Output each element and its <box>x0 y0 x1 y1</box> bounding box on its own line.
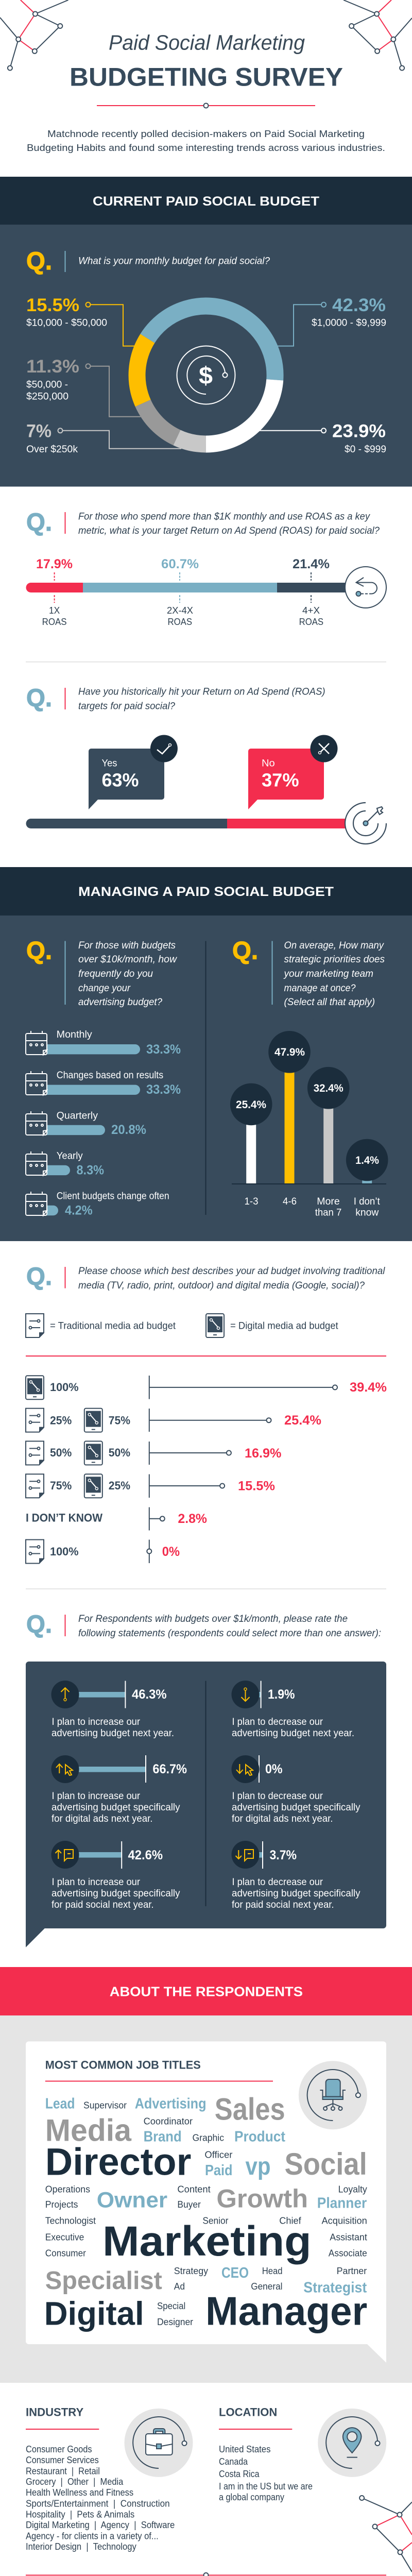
donut labels: $0 - $999 <box>345 444 386 455</box>
question: priorities: (Select all that apply) <box>284 997 375 1008</box>
row: yearly: 8.3% <box>76 1163 104 1178</box>
panel: managing budget <box>0 916 412 1241</box>
stat: increase paid social <box>52 1841 180 1910</box>
question: frequency: over $10k/month, how <box>78 954 177 965</box>
panel: job titles card <box>26 2041 386 2363</box>
question: priorities: manage at once? <box>284 983 356 994</box>
bar chart: priorities: 25.4% <box>236 1099 266 1111</box>
row: changes based on results: Changes based on results <box>57 1070 163 1081</box>
question: priorities <box>232 938 385 1008</box>
word cloud: Coordinator <box>144 2116 193 2127</box>
ROAS labels <box>36 557 330 627</box>
title <box>70 31 343 92</box>
heading: location: LOCATION <box>219 2406 277 2419</box>
row: changes based on results: 33.3% <box>146 1082 181 1097</box>
row: 25/75: 75% <box>109 1414 130 1427</box>
stat: increase digital: 66.7% <box>152 1762 187 1776</box>
location list: Costa Rica <box>219 2468 260 2479</box>
donut labels: 11.3% <box>26 357 79 377</box>
row: 75/25: 15.5% <box>238 1479 275 1493</box>
question: statements <box>26 1611 381 1639</box>
word cloud: Social <box>284 2147 367 2181</box>
question: monthly budget: What is your monthly budget for paid social? <box>78 256 270 267</box>
question: target ROAS: metric, what is your target Return on Ad Spend (ROAS) for paid social? <box>78 526 380 536</box>
donut labels: 15.5% <box>26 295 79 315</box>
stat: increase digital: for digital ads next year. <box>52 1814 152 1824</box>
industry list: Consumer Goods <box>26 2444 92 2454</box>
section header: current paid social budget: CURRENT PAID SOCIAL BUDGET <box>93 194 319 209</box>
industry list: Interior Design | Technology <box>26 2541 136 2552</box>
stat: increase digital <box>52 1755 187 1824</box>
question: frequency: For those with budgets <box>78 940 176 951</box>
word cloud: Content <box>177 2184 211 2195</box>
icon: dollar: $ <box>199 362 213 389</box>
icon: return arrow <box>345 567 386 608</box>
donut labels: $10,000 - $50,000 <box>26 317 107 329</box>
question: target ROAS <box>26 509 380 536</box>
bar chart: priorities: 4-6 <box>283 1196 297 1207</box>
word cloud: CEO <box>221 2265 249 2281</box>
title: BUDGETING SURVEY <box>70 63 343 92</box>
stat: decrease paid social: for paid social next year. <box>232 1900 334 1910</box>
row: quarterly <box>26 1110 146 1137</box>
word cloud: vp <box>245 2153 271 2180</box>
word cloud: Special <box>157 2301 185 2311</box>
row: I don't know <box>26 1507 207 1530</box>
stat: decrease budget: 1.9% <box>268 1687 295 1702</box>
callout: no 37%: 37% <box>262 770 299 790</box>
word cloud: Strategist <box>303 2279 367 2296</box>
word cloud: Manager <box>205 2289 367 2334</box>
row: client budgets <box>26 1191 169 1218</box>
row: quarterly: Quarterly <box>57 1110 98 1121</box>
donut labels: $250,000 <box>26 392 68 402</box>
industry list: Sports/Entertainment | Construction <box>26 2498 170 2509</box>
stat: decrease digital: advertising budget specifically <box>232 1802 360 1813</box>
word cloud: Chief <box>279 2215 302 2226</box>
question: traditional vs digital: media (TV, radio, print, outdoor) and digital media (Google, social)? <box>78 1280 365 1291</box>
question: priorities: On average, How many <box>284 940 384 951</box>
row: 100% traditional: 0% <box>162 1545 180 1559</box>
stat: decrease digital: 0% <box>265 1762 282 1776</box>
industry list: Digital Marketing | Agency | Software <box>26 2519 175 2530</box>
question: frequency <box>26 938 177 1008</box>
word cloud: Growth <box>216 2184 308 2213</box>
row: I don't know: 2.8% <box>178 1512 207 1526</box>
donut labels <box>26 295 386 455</box>
word cloud: Designer <box>157 2317 193 2327</box>
bar chart: priorities: know <box>355 1208 379 1218</box>
callout: yes 63%: 63% <box>102 770 139 790</box>
industry list: Health Wellness and Fitness <box>26 2487 133 2498</box>
word cloud: Executive <box>45 2232 84 2243</box>
location list: I am in the US but we are <box>219 2481 313 2492</box>
word cloud: Acquisition <box>321 2215 367 2226</box>
industry list: Grocery | Other | Media <box>26 2476 124 2487</box>
section header: about the respondents <box>0 1967 412 2015</box>
donut labels: Over $250k <box>26 444 78 455</box>
word cloud: Assistant <box>330 2232 367 2243</box>
icon: target <box>345 803 386 844</box>
question: traditional vs digital: Q. <box>26 1263 52 1291</box>
word cloud: Ad <box>174 2281 185 2292</box>
row: 100% digital: 100% <box>50 1381 79 1394</box>
stat: decrease paid social <box>232 1841 360 1910</box>
question: frequency: advertising budget? <box>78 997 162 1008</box>
word cloud: Brand <box>144 2129 182 2145</box>
stat: increase paid social: 42.6% <box>128 1848 163 1862</box>
footer network decoration <box>359 2496 412 2572</box>
ROAS stacked bar <box>26 557 349 627</box>
row: I don't know: I DON’T KNOW <box>26 1512 102 1524</box>
title divider <box>97 103 315 108</box>
word cloud: Strategy <box>174 2266 208 2276</box>
word cloud: Marketing <box>102 2218 312 2265</box>
row: 75/25: 75% <box>50 1479 72 1492</box>
row: 25/75: 25% <box>50 1414 72 1427</box>
question: frequency: Q. <box>26 938 52 964</box>
donut labels: 42.3% <box>332 295 386 315</box>
word cloud: Associate <box>329 2248 367 2259</box>
footer divider <box>26 2573 386 2576</box>
title: Paid Social Marketing <box>109 31 305 55</box>
word cloud: Specialist <box>45 2267 162 2295</box>
heading: industry: INDUSTRY <box>26 2406 84 2419</box>
stat: increase budget <box>52 1681 174 1739</box>
stat: decrease budget <box>232 1681 354 1739</box>
question: hit ROAS targets: Q. <box>26 685 52 712</box>
question: frequency: change your <box>78 983 131 994</box>
bar chart: priorities: I don’t <box>354 1196 380 1207</box>
header network decoration left <box>0 0 68 70</box>
question: hit ROAS targets <box>26 685 325 712</box>
section header: managing budget: MANAGING A PAID SOCIAL BUDGET <box>78 885 334 899</box>
question: priorities: strategic priorities does <box>284 954 385 965</box>
legend <box>26 1314 338 1337</box>
question: hit ROAS targets: Have you historically hit your Return on Ad Spend (ROAS) <box>78 686 325 698</box>
ROAS labels: 4+X <box>302 605 320 616</box>
question: statements: For Respondents with budgets over $1k/month, please rate the <box>78 1614 348 1624</box>
word cloud: Paid <box>205 2162 233 2179</box>
industry list: Consumer Services <box>26 2454 99 2465</box>
stat: increase budget: 46.3% <box>132 1687 167 1702</box>
stat: decrease paid social: advertising budget specifically <box>232 1888 360 1899</box>
word cloud: Officer <box>204 2149 232 2160</box>
question: monthly budget: Q. <box>26 248 52 275</box>
bar chart: priorities: than 7 <box>315 1208 341 1218</box>
row: 100% digital: 39.4% <box>350 1380 387 1395</box>
ROAS labels: ROAS <box>299 617 323 627</box>
ROAS labels: 17.9% <box>36 557 73 571</box>
intro text: Matchnode recently polled decision-makers on Paid Social Marketing <box>47 129 365 139</box>
bar chart: priorities <box>230 1031 388 1218</box>
stat: increase budget: advertising budget next year. <box>52 1728 174 1739</box>
industry list: Agency - for clients in a variety of... <box>26 2530 159 2541</box>
icon: briefcase <box>125 2409 193 2477</box>
legend: = Traditional media ad budget <box>50 1321 176 1331</box>
panel: respondents background <box>0 2015 412 2383</box>
stat: decrease budget: I plan to decrease our <box>232 1717 323 1727</box>
row: 75/25: 25% <box>109 1479 130 1492</box>
stat: decrease paid social: I plan to decrease our <box>232 1877 323 1888</box>
donut labels: $1,0000 - $9,999 <box>312 317 386 329</box>
word cloud: Consumer <box>45 2248 86 2259</box>
question: statements: following statements (respondents could select more than one answer): <box>78 1628 381 1639</box>
stat: decrease digital: for digital ads next year. <box>232 1814 333 1824</box>
header network decoration right <box>344 0 412 70</box>
word cloud: Media <box>45 2113 132 2148</box>
icon: map pin <box>318 2409 386 2477</box>
row: 100% digital <box>26 1376 387 1399</box>
intro text <box>27 129 385 153</box>
row: 50/50 <box>26 1441 281 1465</box>
row: 75/25 <box>26 1474 275 1498</box>
location list <box>219 2444 313 2502</box>
word cloud: Graphic <box>193 2133 224 2143</box>
word cloud: Partner <box>337 2266 367 2276</box>
panel: location <box>219 2406 386 2502</box>
legend: = Digital media ad budget <box>230 1321 338 1331</box>
callout: no 37%: No <box>262 758 275 769</box>
ROAS labels: 60.7% <box>161 557 199 571</box>
row: 50/50: 16.9% <box>245 1446 281 1461</box>
industry list: Restaurant | Retail <box>26 2465 100 2476</box>
row: 100% traditional: 100% <box>50 1545 79 1558</box>
bar chart: priorities: 1.4% <box>355 1155 379 1166</box>
word cloud: Planner <box>317 2195 367 2211</box>
callout: yes 63%: Yes <box>102 758 117 769</box>
location list: Canada <box>219 2456 248 2467</box>
industry list: Hospitality | Pets & Animals <box>26 2509 134 2520</box>
bar: yes vs no <box>26 819 348 828</box>
connectors <box>58 302 326 449</box>
ROAS labels: ROAS <box>168 617 192 627</box>
question: monthly budget <box>26 248 270 275</box>
stat: decrease paid social: 3.7% <box>270 1848 297 1862</box>
row: changes based on results <box>26 1070 181 1097</box>
row: 50/50: 50% <box>109 1446 130 1459</box>
question: priorities: Q. <box>232 938 258 964</box>
row: client budgets: Client budgets change often <box>57 1191 169 1201</box>
bar chart: priorities: More <box>317 1196 340 1207</box>
question: target ROAS: For those who spend more than $1K monthly and use ROAS as a key <box>78 511 370 522</box>
callout: no 37% <box>248 735 338 809</box>
row: monthly <box>26 1029 181 1057</box>
location list: a global company <box>219 2492 285 2502</box>
stat: increase paid social: advertising budget specifically <box>52 1888 180 1899</box>
panel: statements <box>26 1662 386 1947</box>
ROAS labels: 2X-4X <box>167 605 193 616</box>
word cloud: Owner <box>97 2188 167 2212</box>
bar chart: priorities: 47.9% <box>274 1046 305 1058</box>
section header: current paid social budget <box>0 177 412 225</box>
question: traditional vs digital: Please choose which best describes your ad budget involving traditional <box>78 1266 385 1277</box>
donut labels: 7% <box>26 421 52 441</box>
word cloud: Advertising <box>135 2096 206 2112</box>
word cloud <box>44 2092 367 2334</box>
stat: increase digital: advertising budget specifically <box>52 1802 180 1813</box>
row: monthly: 33.3% <box>146 1042 181 1057</box>
row: yearly: Yearly <box>57 1151 83 1161</box>
ROAS labels: ROAS <box>42 617 67 627</box>
word cloud: Sales <box>215 2092 285 2127</box>
word cloud: Lead <box>45 2096 75 2112</box>
question: target ROAS: Q. <box>26 509 52 536</box>
question: hit ROAS targets: targets for paid social? <box>78 701 175 712</box>
bar chart: priorities: 1-3 <box>244 1196 259 1207</box>
word cloud: General <box>251 2281 282 2292</box>
row: 25/75: 25.4% <box>284 1413 321 1428</box>
word cloud: Projects <box>45 2199 78 2210</box>
section header: about the respondents: ABOUT THE RESPONDENTS <box>110 1984 303 1999</box>
location list: United States <box>219 2444 271 2454</box>
panel: industry <box>26 2406 193 2552</box>
stat: increase budget: I plan to increase our <box>52 1717 141 1727</box>
icon: office chair <box>299 2061 367 2129</box>
row: monthly: Monthly <box>57 1029 92 1040</box>
stat: increase digital: I plan to increase our <box>52 1791 141 1802</box>
section header: managing budget <box>0 867 412 916</box>
ROAS labels: 1X <box>49 605 60 616</box>
word cloud: Head <box>262 2266 282 2276</box>
word cloud: Digital <box>44 2295 144 2332</box>
heading: job titles: MOST COMMON JOB TITLES <box>45 2059 201 2071</box>
row: 25/75 <box>26 1409 321 1432</box>
row: client budgets: 4.2% <box>65 1204 93 1218</box>
question: statements: Q. <box>26 1611 52 1638</box>
word cloud: Product <box>234 2129 285 2145</box>
donut labels: $50,000 - <box>26 379 68 391</box>
word cloud: Loyalty <box>338 2184 367 2195</box>
bar chart: priorities: 32.4% <box>314 1082 344 1094</box>
row: quarterly: 20.8% <box>111 1123 146 1137</box>
icon: dollar <box>177 346 235 404</box>
question: priorities: your marketing team <box>283 969 373 979</box>
question: frequency: frequently do you <box>78 969 153 979</box>
chart: budget mix <box>26 1376 387 1563</box>
word cloud: Buyer <box>177 2199 201 2210</box>
panel: current budget <box>0 225 412 486</box>
ROAS labels: 21.4% <box>293 557 330 571</box>
row: yearly <box>26 1151 104 1178</box>
row: 100% traditional <box>26 1539 180 1563</box>
intro text: Budgeting Habits and found some interesting trends across various industries. <box>27 143 385 153</box>
callout: yes 63% <box>89 735 178 809</box>
word cloud: Supervisor <box>83 2100 127 2111</box>
word cloud: Operations <box>45 2184 90 2195</box>
question: traditional vs digital <box>26 1263 385 1291</box>
donut chart <box>137 306 275 444</box>
stat: decrease digital <box>232 1755 360 1824</box>
word cloud: Senior <box>202 2215 228 2226</box>
row: 50/50: 50% <box>50 1446 72 1459</box>
word cloud: Director <box>45 2140 191 2183</box>
word cloud: Technologist <box>45 2215 96 2226</box>
donut labels: 23.9% <box>332 421 386 441</box>
stat: decrease digital: I plan to decrease our <box>232 1791 323 1802</box>
stat: decrease budget: advertising budget next year. <box>232 1728 354 1739</box>
stat: increase paid social: I plan to increase our <box>52 1877 141 1888</box>
stat: increase paid social: for paid social next year. <box>52 1900 153 1910</box>
industry list <box>26 2444 175 2552</box>
